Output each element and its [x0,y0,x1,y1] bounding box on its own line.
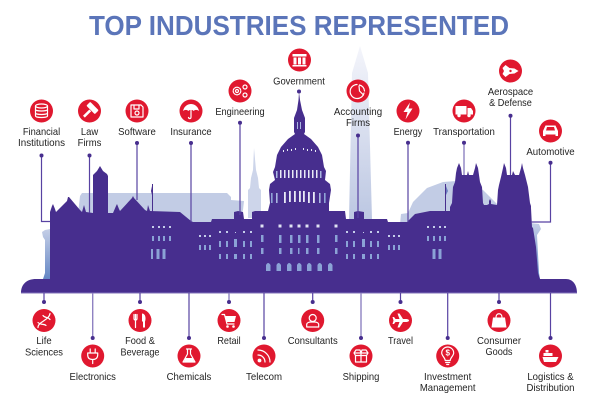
item: Financial Institutions: Financial [23,127,60,138]
dome windows [271,122,326,203]
item: Software: Software [118,127,156,138]
rear building left [78,193,244,224]
item: Shipping: Shipping [343,372,380,383]
item: Aerospace & Defense: Aerospace [488,87,533,98]
item: Investment Management: Investment [424,372,471,383]
rear dome right [400,181,498,224]
item: Insurance [170,100,212,222]
item: Food & Beverage [120,293,160,358]
item: Consumer Goods [477,293,522,358]
item: Telecom: Telecom [246,372,282,383]
item: Telecom [246,293,282,383]
item: Logistics & Distribution: Distribution [526,383,574,394]
item: Transportation [433,100,495,175]
item: Chemicals [167,293,211,383]
item: Law Firms: Law [81,127,99,138]
item: Law Firms [78,100,101,213]
item: Engineering [215,80,265,215]
item: Accounting Firms [334,80,382,218]
item: Electronics [70,293,116,383]
item: Food & Beverage: Beverage [120,348,160,358]
item: Shipping [343,293,380,383]
capitol centre windows [260,224,338,228]
item: Accounting Firms: Accounting [334,107,382,118]
item: Consultants: Consultants [288,336,338,347]
item: Travel [388,293,413,347]
item: Chemicals: Chemicals [167,372,211,383]
item: Energy: Energy [394,127,423,138]
item: Investment Management: $ [445,348,450,358]
item: Life Sciences [25,293,63,358]
item: Logistics & Distribution [526,293,574,394]
item: Consultants [288,293,338,347]
item: Investment Management [420,293,476,394]
item: Aerospace & Defense: & Defense [489,98,532,109]
item: Transportation: Transportation [433,127,495,138]
item: Insurance: Insurance [170,127,212,138]
title: TOP INDUSTRIES REPRESENTED [89,10,509,41]
item: Automotive [526,120,575,222]
item: Life Sciences: Sciences [25,348,63,358]
item: Consumer Goods: Consumer [477,336,522,347]
item: Retail [217,293,241,347]
flag poles [152,184,446,212]
base edge [21,292,577,293]
item: Life Sciences: Life [36,336,52,347]
item: Accounting Firms: Firms [346,118,370,129]
gothic spire [248,148,261,218]
item: Automotive: Automotive [526,147,575,158]
item: Aerospace & Defense [488,60,533,175]
item: Electronics: Electronics [70,372,116,383]
item: Law Firms: Firms [78,138,101,149]
item: Financial Institutions: Institutions [18,138,65,149]
item: Engineering: Engineering [215,107,265,118]
wing windows [219,241,221,247]
item: Government: Government [273,76,325,88]
item: Software [118,100,156,200]
item: Logistics & Distribution: Logistics & [527,372,574,383]
washington monument [349,46,372,219]
item: Financial Institutions [18,100,65,222]
item: Food & Beverage: Food & [125,336,155,347]
background landmarks [42,46,541,279]
item: Investment Management: Management [420,383,476,394]
item: Government [273,48,325,94]
item: Energy [394,100,423,222]
item: Retail: Retail [217,336,241,347]
item: Travel: Travel [388,336,413,347]
capitol skyline silhouette [21,92,577,293]
rear wing left [42,229,50,279]
item: Consumer Goods: Goods [486,347,512,358]
rear wing right [530,223,541,279]
